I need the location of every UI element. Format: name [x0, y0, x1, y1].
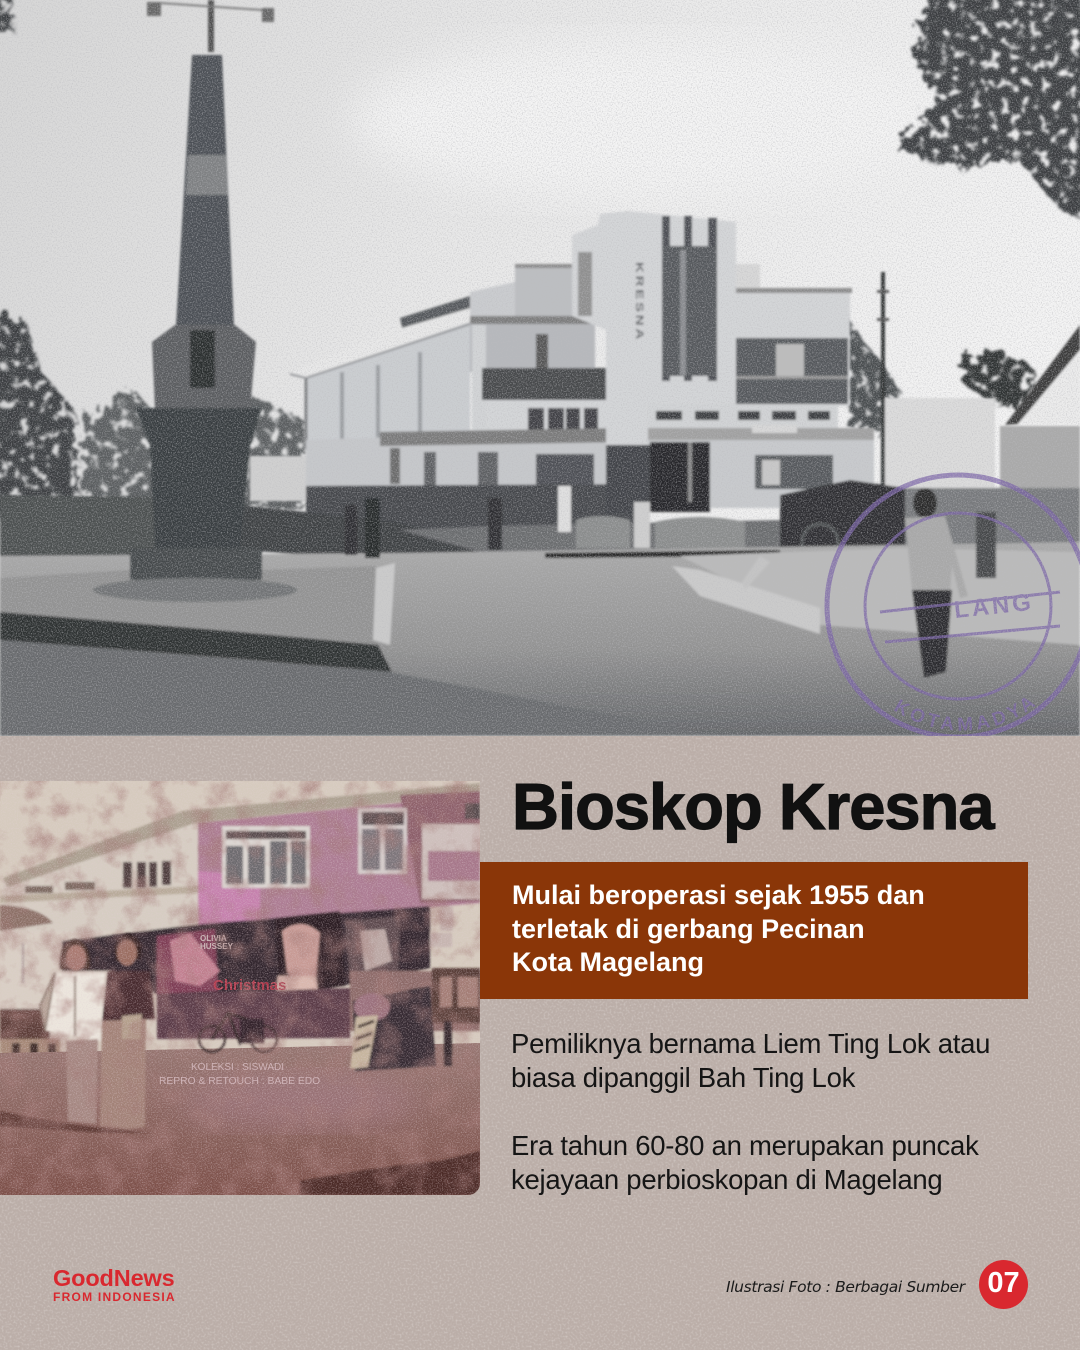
logo: GoodNews from Indonesia [53, 1265, 176, 1304]
people [913, 488, 937, 518]
mottled ageing texture [0, 781, 480, 1195]
text block: golden era: Era tahun 60-80 an merupakan puncak [511, 1130, 979, 1161]
monument plinth and curb [0, 566, 376, 645]
watermark: REPRO & RETOUCH : BABE EDO [159, 1076, 320, 1087]
poster lettering: Christmas [213, 977, 286, 994]
text block: golden era [511, 1130, 979, 1195]
purple archive stamp: LANG [953, 589, 1035, 624]
page number badge [979, 1260, 1028, 1309]
hedge, crowd and low planting [0, 495, 240, 566]
umbrella [0, 905, 53, 931]
sign: KRESNA vertical lettering: KRESNA [633, 262, 645, 342]
under the posters [157, 988, 350, 1039]
watermark [159, 1062, 320, 1087]
two men [60, 939, 90, 969]
cinema: side wing [306, 322, 470, 450]
ground [0, 1043, 480, 1195]
callout: opening year and location: Kota Magelang [512, 947, 704, 977]
callout: opening year and location [480, 862, 1028, 999]
road [0, 542, 1080, 736]
photo: Kresna cinema building and obelisk monument [0, 0, 1080, 736]
heading: Bioskop Kresna [512, 770, 994, 843]
logo: GoodNews from Indonesia: FROM INDONESIA [53, 1290, 176, 1304]
vendor cart [353, 986, 436, 1071]
text block: golden era: kejayaan perbioskopan di Magelang [511, 1164, 942, 1195]
posters [62, 906, 430, 994]
page number badge: 07 [987, 1267, 1020, 1299]
right wing [736, 264, 760, 292]
watermark: KOLEKSI : SISWADI [191, 1062, 284, 1073]
obelisk [176, 55, 234, 325]
text block: owner: biasa dipanggil Bah Ting Lok [511, 1062, 855, 1093]
tower [572, 211, 736, 450]
photo: colour-faded cinema with film posters: HUSSEY [200, 942, 234, 951]
photo credit: Ilustrasi Foto : Berbagai Sumber [726, 1278, 965, 1296]
photo: colour-faded cinema with film posters [0, 781, 480, 1195]
right-side buildings [885, 398, 995, 493]
foliage [0, 0, 1080, 520]
purple archive stamp [824, 472, 1080, 736]
logo: GoodNews from Indonesia: GoodNews [53, 1265, 175, 1291]
photo: colour-faded cinema with film posters: OLIVIA [200, 934, 227, 943]
text block: owner: Pemiliknya bernama Liem Ting Lok atau [511, 1028, 990, 1059]
paper grain texture [0, 736, 1080, 1350]
pole [881, 272, 885, 487]
text block: owner [511, 1028, 990, 1093]
purple archive stamp: KOTAMADYA [894, 698, 1036, 731]
building [0, 815, 198, 935]
bicycle [199, 1026, 225, 1052]
callout: opening year and location: Mulai beroperasi sejak 1955 dan [512, 880, 925, 910]
panel: lower beige section [0, 736, 1080, 1350]
callout: opening year and location: terletak di gerbang Pecinan [512, 914, 865, 944]
